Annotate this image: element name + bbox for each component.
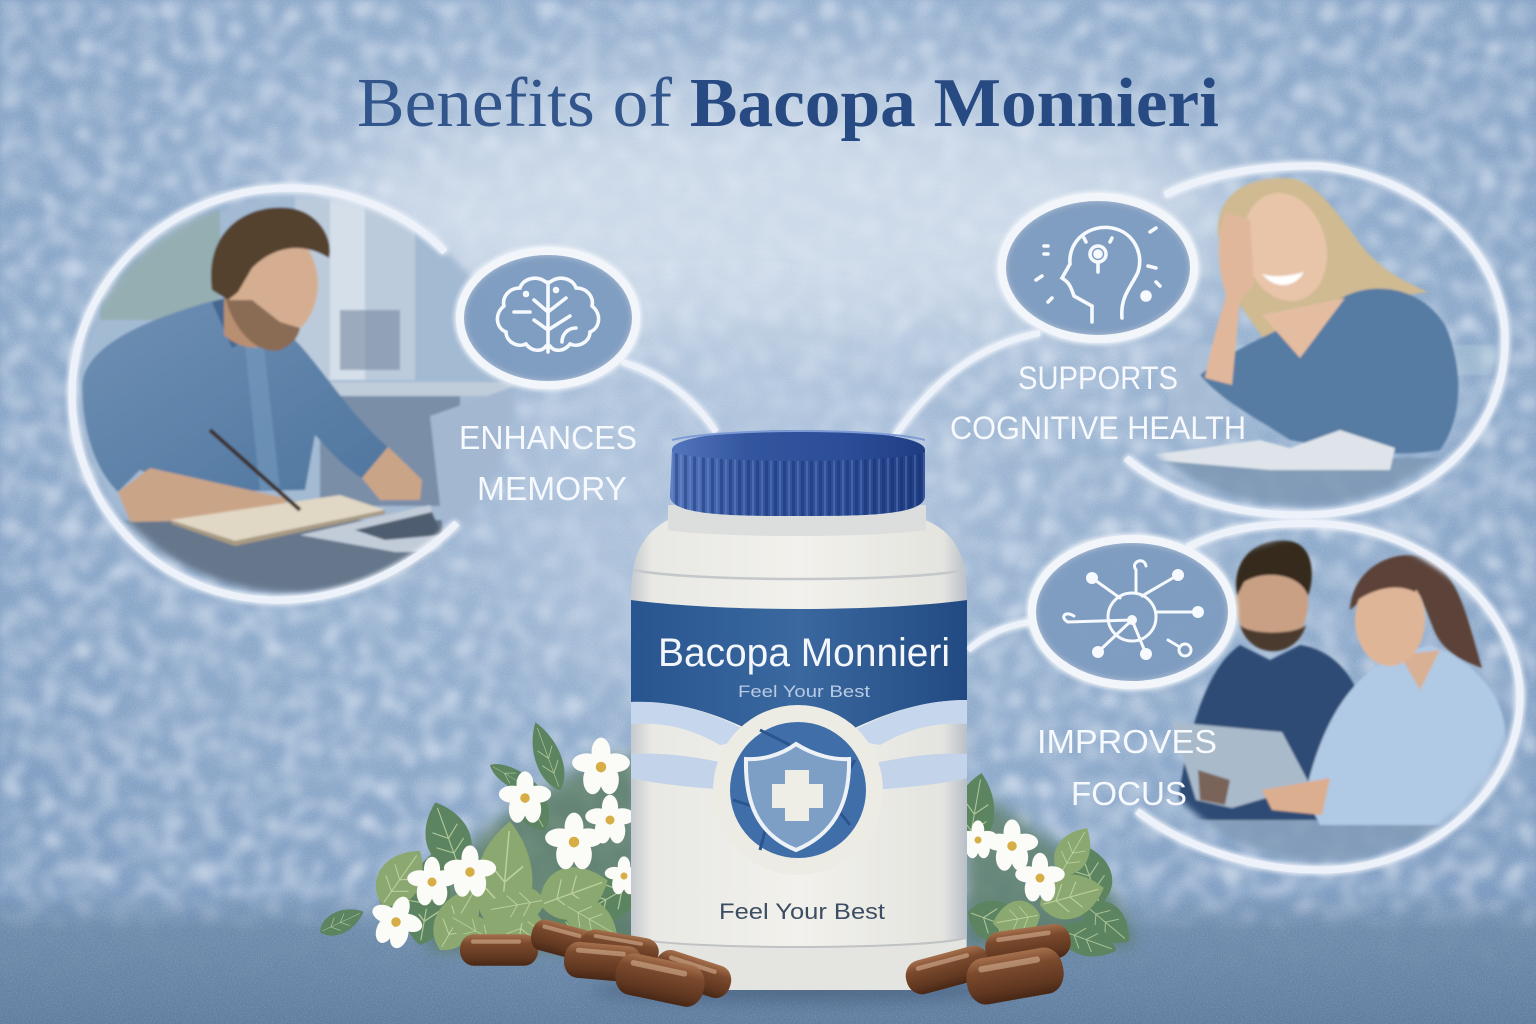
tablet — [1172, 722, 1310, 808]
label: focus: FOCUS — [1071, 775, 1187, 812]
bottle base ring — [633, 938, 966, 990]
panel: improves focus — [1137, 523, 1520, 875]
woman — [1305, 645, 1506, 825]
sweater — [1200, 289, 1458, 453]
laptop — [430, 385, 518, 550]
bubble outline — [1126, 166, 1505, 515]
photo: man writing at laptop — [79, 198, 514, 595]
bottle footer text: Feel Your Best — [719, 899, 885, 924]
notebook and pen — [170, 495, 385, 541]
label: improves: IMPROVES — [1037, 723, 1217, 760]
panel: enhances memory — [60, 180, 540, 615]
hair — [1218, 178, 1428, 348]
shield badge — [713, 705, 883, 875]
icon: brain — [460, 251, 636, 385]
connector: focus — [968, 622, 1032, 650]
title: Benefits of Bacopa Monnieri — [357, 65, 1219, 142]
arm and hand — [1205, 212, 1254, 385]
bottle tagline: Feel Your Best — [738, 682, 870, 701]
photo: couple with tablet — [1173, 538, 1506, 862]
arms — [118, 468, 292, 524]
label: cognitive health: COGNITIVE HEALTH — [950, 410, 1246, 446]
head — [222, 297, 260, 349]
book — [1130, 430, 1395, 470]
capsules — [460, 917, 1073, 1010]
label: enhances memory: ENHANCES — [459, 419, 637, 456]
bubble outline — [1137, 523, 1520, 870]
bottle cap — [670, 430, 925, 516]
icon: neural network — [1032, 539, 1232, 685]
label band — [631, 600, 967, 735]
bottle — [590, 430, 1010, 1002]
plants right — [948, 770, 1141, 966]
connector: memory — [622, 362, 716, 432]
connector: cognitive — [895, 333, 1040, 436]
man — [1178, 645, 1365, 820]
label line: memory: MEMORY — [477, 470, 627, 507]
icon: head with lightbulb — [1002, 197, 1194, 339]
panel: supports cognitive health — [1126, 166, 1510, 518]
neck ring — [668, 505, 926, 536]
bubble outline — [72, 188, 457, 600]
bottle body — [631, 520, 967, 990]
photo: smiling woman reading — [1154, 176, 1492, 508]
face — [1246, 192, 1328, 302]
shirt — [82, 298, 388, 492]
bottle brand: Bacopa Monnieri — [658, 631, 950, 675]
plants left — [315, 718, 651, 960]
label: supports: SUPPORTS — [1018, 360, 1178, 396]
bottle shadow — [590, 978, 1010, 1002]
